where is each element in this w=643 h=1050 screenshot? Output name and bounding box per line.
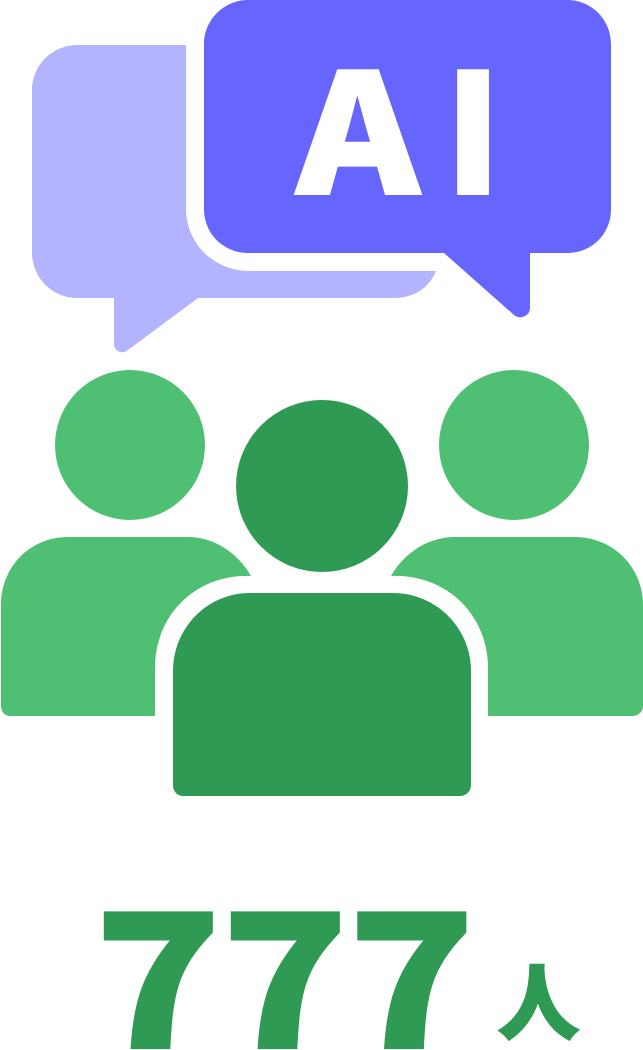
AI label: A [295, 2, 421, 242]
AI label: I [444, 1, 502, 242]
icon: right person [391, 370, 643, 716]
icon: AI speech bubble [204, 0, 611, 317]
number [94, 838, 475, 1050]
icon: center person [173, 400, 471, 796]
count: 777 people [94, 838, 580, 1050]
icon: left person [1, 370, 251, 716]
icon: light speech bubble [32, 45, 436, 352]
AI label [295, 1, 502, 242]
